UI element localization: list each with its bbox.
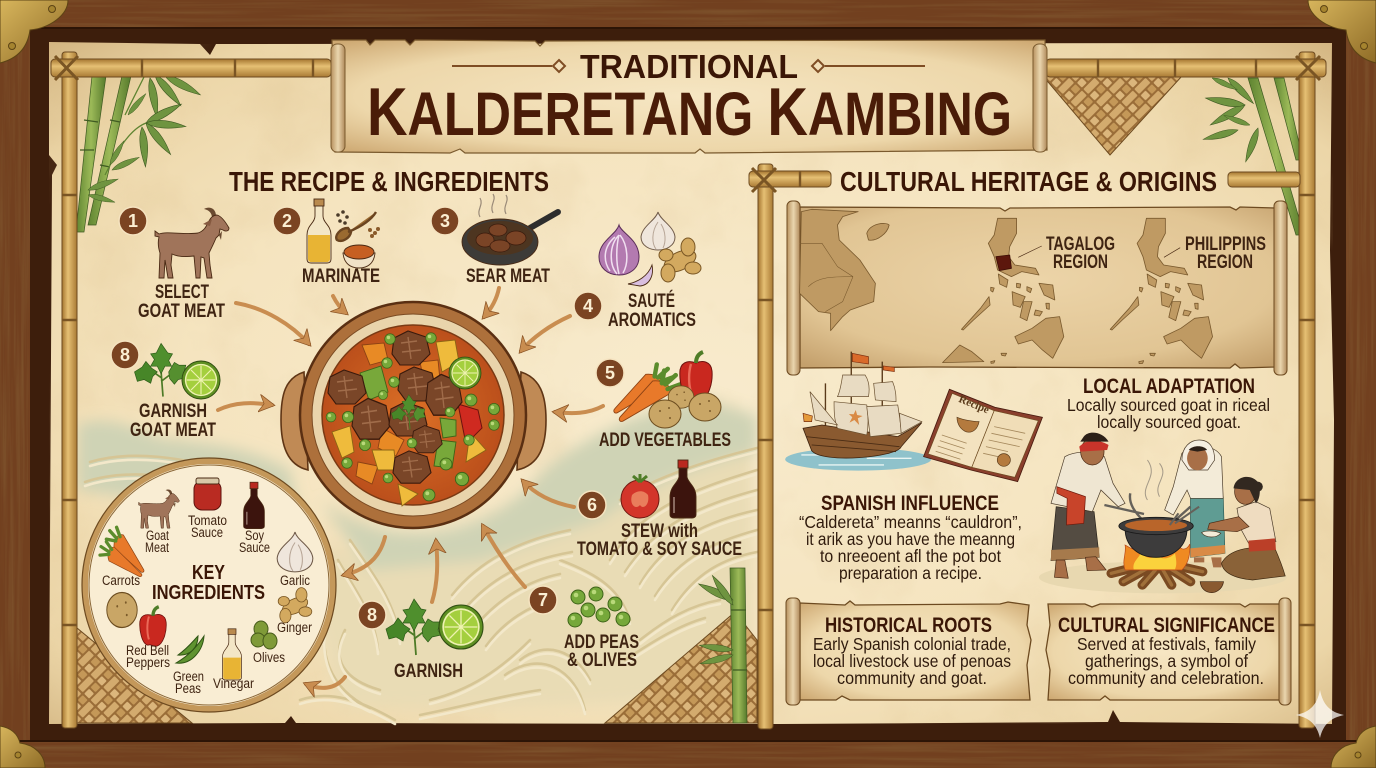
title line 1: TRADITIONAL — [580, 48, 798, 85]
step 4: saute aromatics — [574, 212, 701, 331]
step 5: add vegetables: 5 — [605, 363, 615, 383]
woman in veil — [1165, 440, 1225, 567]
step 4: saute aromatics: AROMATICS — [608, 310, 696, 331]
text: spanish influence: preparation a recipe. — [839, 563, 982, 583]
galleon ship — [785, 352, 931, 471]
ingredient: olives — [251, 621, 285, 665]
woven mat: bottom left — [77, 628, 192, 723]
ingredient: tomato sauce: Tomato — [188, 513, 227, 528]
step 2: marinate: MARINATE — [302, 266, 380, 287]
process arrows — [218, 288, 603, 688]
map label: Philippines region — [1185, 234, 1266, 273]
step 2: marinate: 2 — [282, 211, 292, 231]
step 6: stew with tomato and soy sauce: STEW with — [621, 521, 698, 542]
heading: CULTURAL SIGNIFICANCE — [1058, 614, 1275, 637]
pot handles — [281, 372, 546, 470]
ingredient: soy sauce — [239, 482, 270, 555]
stew pot — [281, 302, 546, 528]
title line 2: KALDERETANG KAMBING — [367, 74, 1012, 150]
cook with ladle — [1051, 433, 1147, 578]
step 4: saute aromatics: SAUTÉ — [628, 290, 675, 312]
stew — [322, 325, 504, 506]
step 6: stew with tomato and soy sauce — [577, 460, 742, 560]
text: spanish influence — [799, 512, 1022, 583]
step 1: select goat meat: SELECT — [155, 282, 209, 303]
step 6: stew with tomato and soy sauce: 6 — [587, 495, 597, 515]
title ornaments — [452, 60, 925, 72]
ingredient: goat meat: Goat — [146, 528, 169, 543]
step 4: saute aromatics: 4 — [583, 296, 593, 316]
step 7: add peas and olives: 7 — [538, 590, 548, 610]
step 1: select goat meat: 1 — [128, 211, 138, 231]
step 8: garnish (bottom): 8 — [367, 605, 377, 625]
woven mat: bottom right — [605, 612, 757, 723]
map label: Philippines region: REGION — [1197, 252, 1253, 273]
kneeling woman — [1202, 477, 1285, 580]
illustration: cooking over the fire — [1039, 433, 1287, 593]
cauldron — [1119, 507, 1199, 557]
step 3: sear meat — [431, 194, 558, 287]
key ingredients wheel — [82, 458, 336, 712]
panel: cultural significance — [1046, 598, 1291, 705]
bamboo frame: left pole and top rail — [51, 52, 331, 728]
heading: local adaptation: LOCAL ADAPTATION — [1083, 375, 1255, 398]
wheel heading — [152, 562, 265, 604]
bamboo frame: centre divider — [749, 164, 1300, 729]
ingredient: tomato sauce: Sauce — [191, 525, 223, 540]
ingredient: tomato sauce — [188, 478, 227, 540]
text: spanish influence: “Caldereta” meanns “cauldron”, — [799, 512, 1022, 532]
ingredient: soy sauce: Soy — [245, 528, 264, 543]
pot rim — [300, 302, 526, 528]
step 1: select goat meat: GOAT MEAT — [138, 301, 225, 322]
banner scroll — [331, 40, 1047, 153]
body text: community and goat. — [837, 668, 987, 688]
body text — [1068, 634, 1264, 688]
heading: recipe section: THE RECIPE & INGREDIENTS — [229, 166, 549, 197]
ingredient: ginger: Ginger — [277, 620, 312, 635]
map label: Tagalog region — [1046, 234, 1115, 273]
text: spanish influence: it arik as you have the meanng — [806, 529, 1015, 549]
map label: Tagalog region: TAGALOG — [1046, 234, 1115, 255]
ingredient: vinegar — [213, 629, 254, 691]
body text: Early Spanish colonial trade, — [813, 634, 1011, 654]
bamboo: green stalks top right — [1202, 75, 1304, 235]
ingredient: soy sauce: Sauce — [239, 540, 270, 555]
map label: Tagalog region: REGION — [1053, 252, 1108, 273]
body text: local livestock use of penoas — [813, 651, 1011, 671]
step 8: garnish (bottom) — [358, 599, 483, 682]
steam — [1145, 460, 1163, 500]
step 1: select goat meat — [119, 207, 229, 322]
ingredient: goat meat: Meat — [145, 540, 169, 555]
ingredient: olives: Olives — [253, 650, 285, 665]
step 3: sear meat: SEAR MEAT — [466, 266, 550, 287]
ingredient: carrots — [97, 527, 144, 588]
bamboo: green stalk bottom right — [697, 568, 747, 723]
ingredient: ginger — [277, 588, 312, 635]
text: local adaptation: Locally sourced goat in riceal — [1067, 395, 1270, 415]
step 8: garnish goat meat (left): 8 — [120, 345, 130, 365]
step 7: add peas and olives: & OLIVES — [567, 650, 637, 671]
body text: gatherings, a symbol of — [1085, 651, 1248, 671]
ingredient: garlic: Garlic — [280, 573, 310, 588]
map land masses — [800, 209, 1213, 364]
title banner — [331, 40, 1047, 153]
step 2: marinate — [273, 199, 380, 287]
ingredient: potato — [107, 592, 137, 628]
step 8: garnish goat meat (left) — [111, 341, 220, 441]
wheel heading: INGREDIENTS — [152, 582, 265, 604]
wheel heading: KEY — [192, 562, 226, 584]
step 8: garnish goat meat (left): GARNISH — [139, 401, 207, 422]
map scroll — [787, 201, 1287, 375]
ingredient: garlic — [277, 532, 313, 588]
woven mat: top right — [1043, 76, 1182, 155]
ingredient: green peas: Peas — [175, 681, 201, 696]
step 5: add vegetables — [596, 352, 731, 451]
step 7: add peas and olives — [529, 586, 639, 671]
map label: Philippines region: PHILIPPINS — [1185, 234, 1266, 255]
logs and bowl — [1111, 565, 1224, 593]
ingredient: green peas: Green — [173, 669, 204, 684]
sparkle watermark — [1296, 690, 1344, 738]
heading: spanish influence: SPANISH INFLUENCE — [821, 492, 999, 515]
heading: heritage section: CULTURAL HERITAGE & ORIGINS — [840, 166, 1217, 197]
body text — [813, 634, 1011, 688]
ingredient: goat meat — [139, 489, 179, 555]
ingredient: red bell peppers: Red Bell — [126, 643, 169, 658]
body text: community and celebration. — [1068, 668, 1264, 688]
step 8: garnish (bottom): GARNISH — [394, 661, 463, 682]
step 7: add peas and olives: ADD PEAS — [564, 632, 639, 653]
ingredient: green peas — [173, 636, 204, 696]
step 6: stew with tomato and soy sauce: TOMATO & SOY SAUCE — [577, 539, 742, 560]
panel: historical roots — [786, 598, 1031, 705]
body text: Served at festivals, family — [1077, 634, 1256, 654]
bamboo frame: right pole and top rail — [1046, 52, 1326, 728]
ingredient: red bell peppers — [126, 607, 170, 670]
text: local adaptation: locally sourced goat. — [1097, 412, 1241, 432]
ingredient: red bell peppers: Peppers — [126, 655, 170, 670]
text: spanish influence: to nreeoent afl the pot bot — [820, 546, 1001, 566]
recipe book: Recipe — [957, 393, 991, 416]
step 3: sear meat: 3 — [440, 211, 450, 231]
heading: HISTORICAL ROOTS — [825, 614, 992, 637]
landscape: hills and rice terraces — [78, 398, 757, 724]
flames — [1124, 543, 1190, 570]
text: local adaptation — [1067, 395, 1270, 432]
step 5: add vegetables: ADD VEGETABLES — [599, 430, 731, 451]
recipe book — [924, 389, 1042, 482]
step 8: garnish goat meat (left): GOAT MEAT — [130, 420, 216, 441]
ingredient: carrots: Carrots — [102, 573, 140, 588]
bamboo: green stalks top left — [76, 72, 202, 232]
ingredient: vinegar: Vinegar — [213, 676, 254, 691]
